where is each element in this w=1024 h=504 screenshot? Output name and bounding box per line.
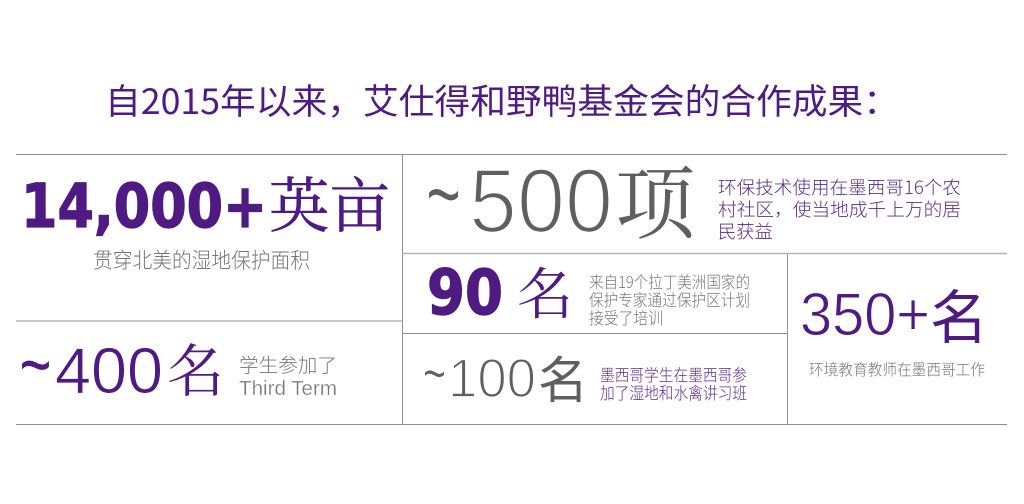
- stat: 90: 90: [427, 256, 503, 329]
- description: Mexican students: [600, 362, 747, 404]
- panel: technologies: [426, 138, 961, 255]
- stat: ~500: [426, 138, 613, 252]
- description: Mexican students: 加了湿地和水禽讲习班: [600, 380, 747, 404]
- description: wetland area: 贯穿北美的湿地保护面积: [93, 244, 310, 275]
- stat: ~500: ~: [426, 138, 461, 250]
- stat unit: 名: 名: [930, 271, 988, 355]
- stat: ~400: [20, 327, 163, 407]
- description: teachers: 环境教育教师在墨西哥工作: [809, 358, 985, 380]
- panel: Mexican students: [423, 340, 747, 413]
- stat: ~100: ~: [423, 340, 446, 407]
- stat unit: 名: 名: [517, 251, 573, 331]
- description: technologies: 民获益: [718, 218, 773, 244]
- stat: ~400: 400: [55, 334, 163, 407]
- description: Third Term: [239, 349, 337, 400]
- stat: ~400: ~: [20, 327, 51, 403]
- panel: teachers: [800, 271, 988, 380]
- stat: ~500: 500: [469, 151, 613, 252]
- stat unit: 项: 项: [615, 140, 696, 255]
- stat unit: 名: 名: [167, 326, 224, 408]
- stat: 14,000+ acres: [21, 159, 390, 245]
- panel: experts: [427, 251, 750, 331]
- description: technologies: 环保技术使用在墨西哥16个农: [718, 174, 961, 200]
- description: Third Term: 学生参加了: [239, 349, 337, 378]
- description: technologies: [718, 174, 961, 244]
- panel: students: [20, 326, 337, 408]
- stat: ~100: [423, 340, 536, 409]
- stat: 14,000+ acres: 14,000+: [21, 171, 267, 242]
- title: 自2015年以来，艾仕得和野鸭基金会的合作成果：: [105, 74, 899, 125]
- description: experts: [589, 269, 750, 329]
- stat: 14,000+ acres: 英亩: [269, 159, 390, 245]
- description: technologies: 村社区，使当地成千上万的居: [718, 196, 961, 222]
- stat unit: 名: 名: [538, 341, 588, 413]
- description: Mexican students: 墨西哥学生在墨西哥参: [600, 362, 747, 386]
- description: Third Term: Third Term: [239, 378, 337, 400]
- panel: wetland acres: [21, 159, 390, 275]
- description: experts: 来自19个拉丁美洲国家的: [589, 269, 750, 293]
- stat: 350+: 350+: [800, 281, 930, 348]
- description: experts: 接受了培训: [589, 305, 663, 329]
- description: experts: 保护专家通过保护区计划: [589, 287, 750, 311]
- stat: ~100: 100: [448, 347, 536, 409]
